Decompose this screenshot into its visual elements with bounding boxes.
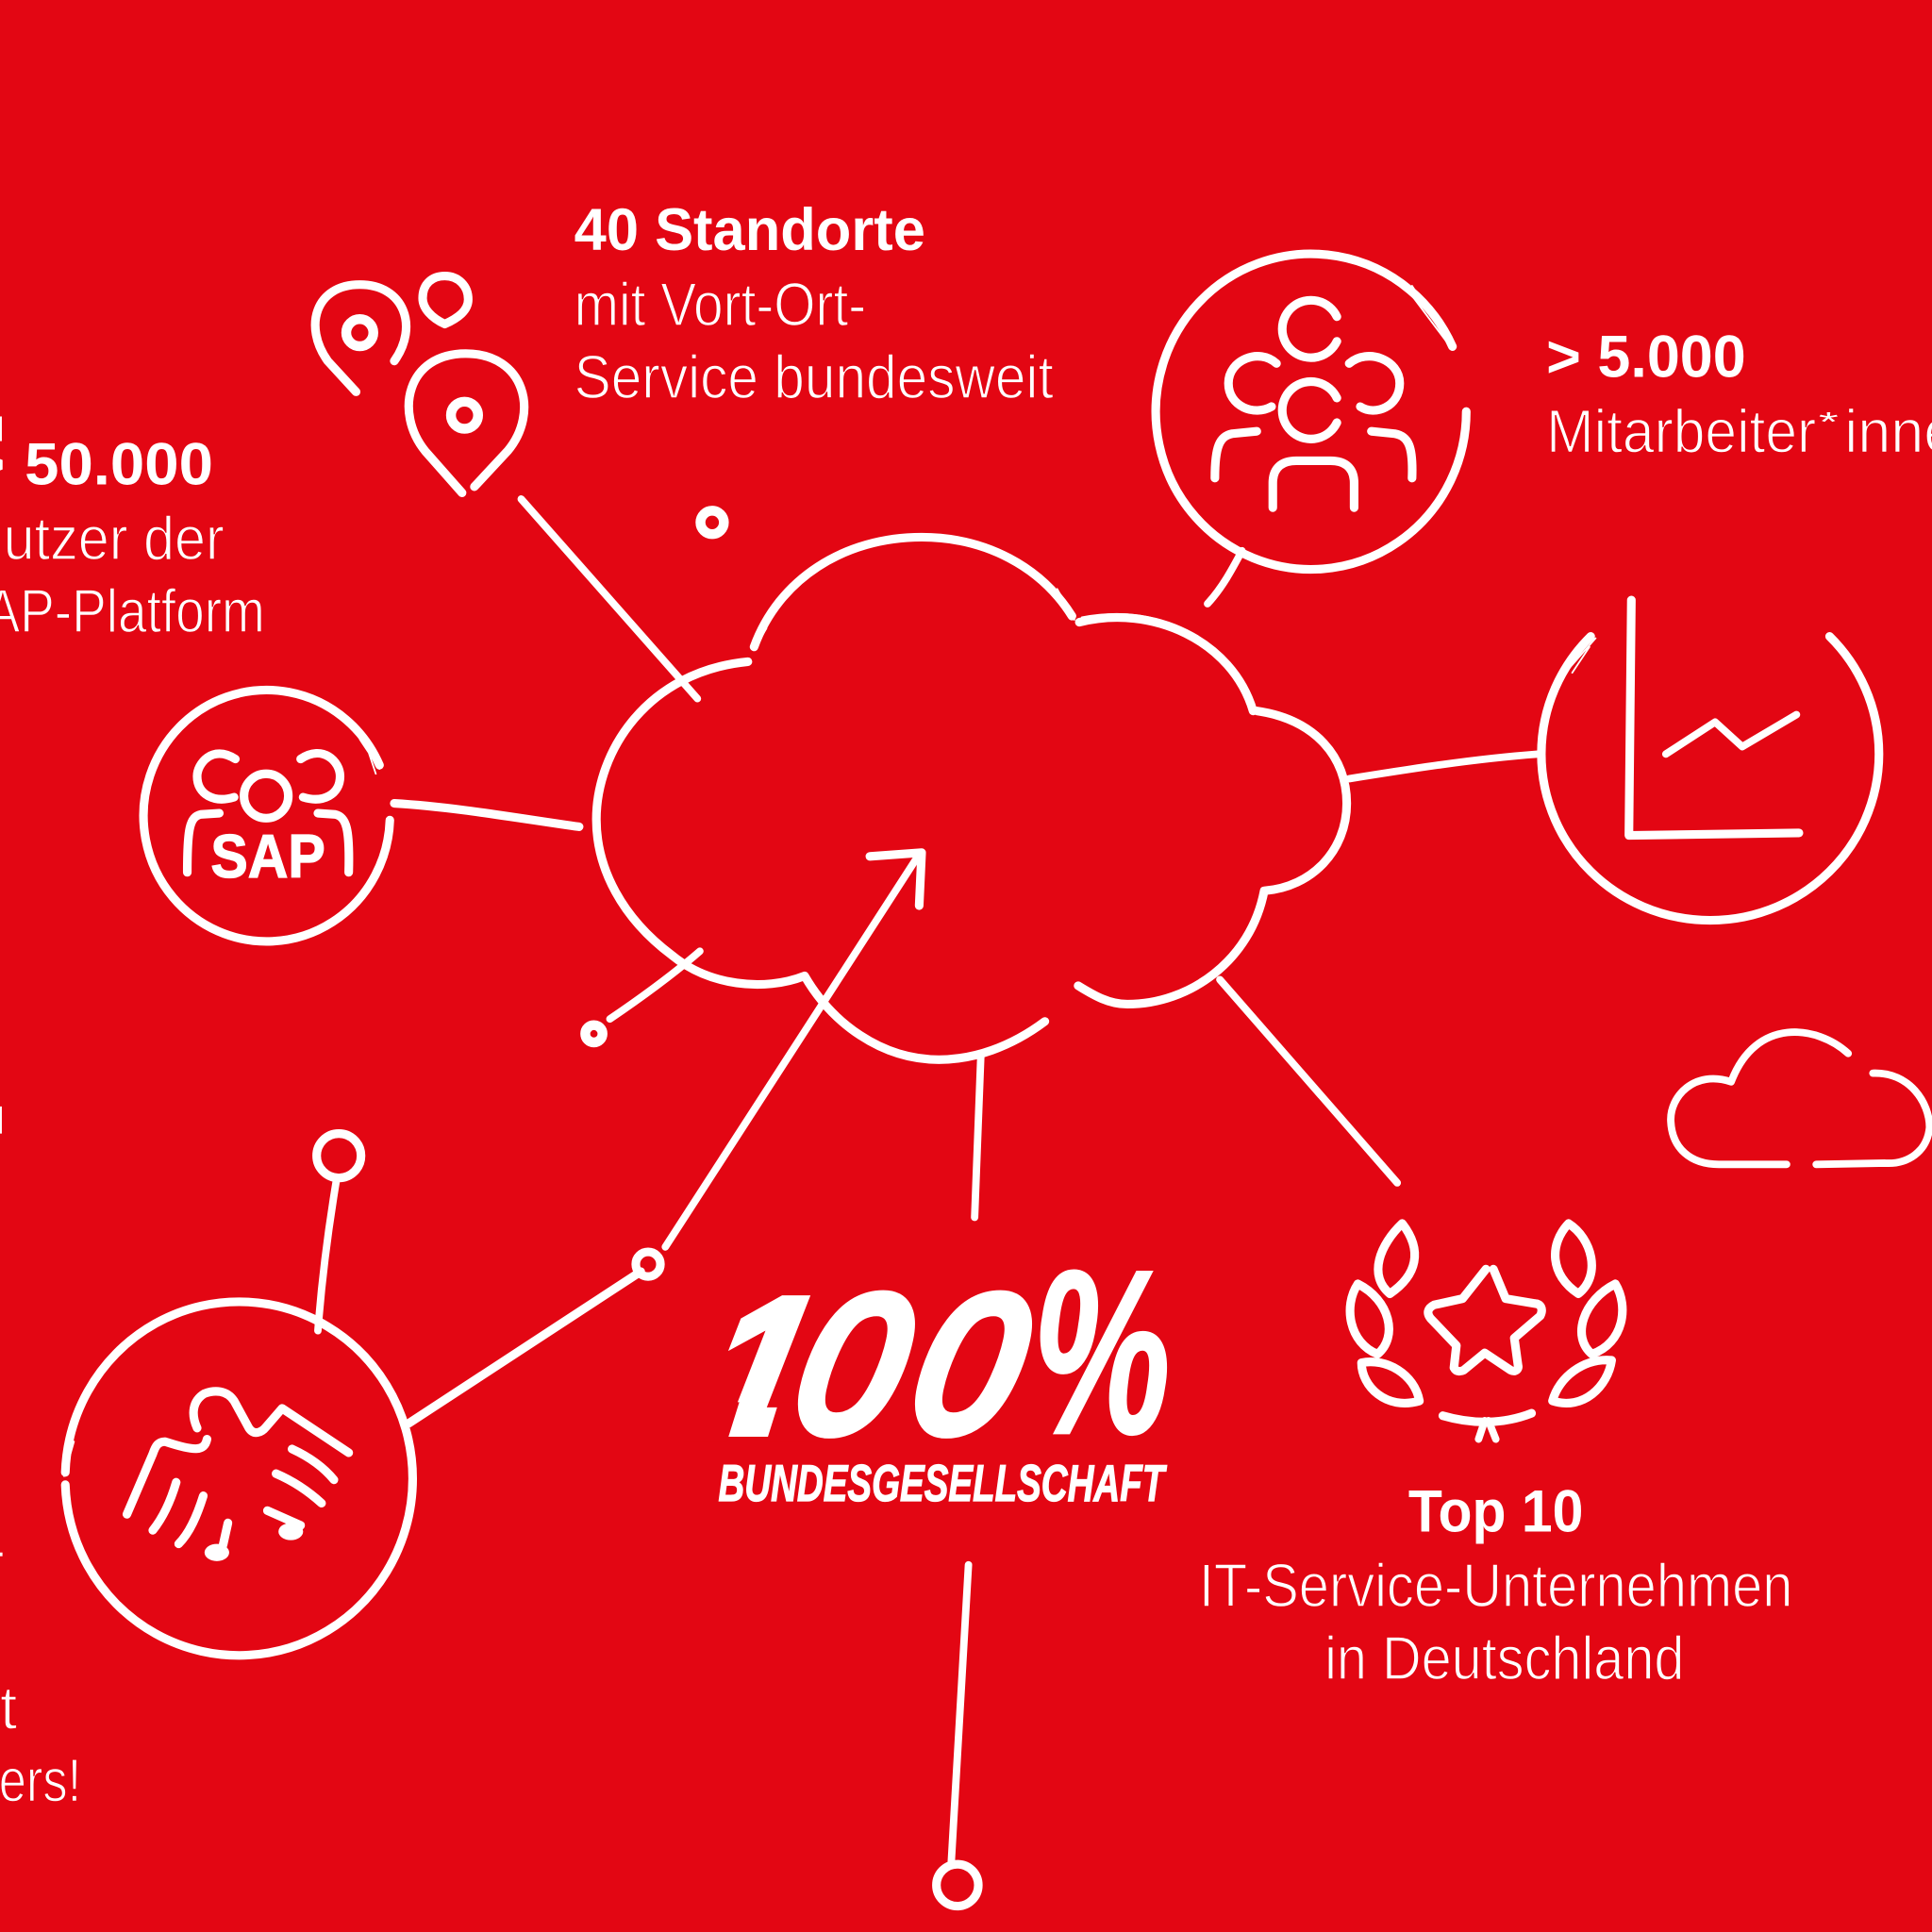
stat: 5.000 Mitarbeiter: > 5.000 <box>1546 325 1746 391</box>
node: small ring lower left of cloud <box>585 1025 603 1042</box>
stat: 5.000 Mitarbeiter: * <box>1819 408 1839 438</box>
arrow into cloud <box>665 853 922 1247</box>
stat: 5.000 Mitarbeiter <box>1546 325 1932 465</box>
headline: 100% Bundesgesellschaft: 0 <box>897 1256 1043 1472</box>
node: bottom ring <box>937 1864 978 1907</box>
headline: 100% Bundesgesellschaft: % <box>1033 1221 1171 1483</box>
headline: 100% Bundesgesellschaft <box>684 1221 1171 1512</box>
stat: 5.000 Mitarbeiter: Mitarbeiter <box>1546 396 1816 465</box>
connector: SAP to cloud <box>394 804 579 826</box>
stat: 40 Standorte: Service bundesweit <box>575 342 1054 411</box>
node: ring above eagle <box>317 1134 361 1178</box>
stat: 40 Standorte: mit Vort-Ort- <box>575 270 866 339</box>
connector: eagle to top ring <box>318 1180 337 1331</box>
connector: eagle to middle ring <box>409 1272 641 1424</box>
icon: laurel and star <box>1350 1224 1623 1440</box>
connector: bottom line <box>951 1565 969 1863</box>
headline: 100% Bundesgesellschaft: 0 <box>780 1256 926 1472</box>
icon: eagle handshake circle <box>64 1302 412 1656</box>
node: small ring above cloud <box>701 510 724 534</box>
connector: cloud to 100 percent <box>974 1058 981 1217</box>
text fragment lower left: t <box>0 1673 17 1741</box>
stat: Top 10: in Deutschland <box>1324 1624 1684 1692</box>
headline: 100% Bundesgesellschaft: BUNDESGESELLSCHAFT <box>718 1454 1167 1512</box>
stat: 50.000 Nutzer <box>0 431 265 645</box>
icon: SAP users circle: SAP <box>210 822 325 891</box>
node: ring between eagle and arrow <box>636 1252 660 1276</box>
text fragment lower left <box>0 1673 81 1815</box>
central cloud <box>596 537 1347 1059</box>
stat: Top 10 <box>1199 1479 1792 1692</box>
connector: cloud to chart <box>1349 754 1538 778</box>
icon: SAP users circle <box>143 691 390 941</box>
connector: cloud to laurel <box>1220 979 1397 1183</box>
connector: people to cloud <box>1208 551 1242 604</box>
location pins icon <box>315 276 525 492</box>
text fragment lower left: ers! <box>0 1746 81 1815</box>
stat: Top 10: IT-Service-Unternehmen <box>1199 1551 1792 1620</box>
icon: small cloud <box>1671 1032 1929 1164</box>
icon: growth chart circle <box>1541 600 1879 921</box>
stat: 50.000 Nutzer: 50.000 <box>25 431 213 497</box>
icon: people circle <box>1156 254 1466 570</box>
connector: small node to cloud <box>610 951 700 1019</box>
connector: locations to cloud <box>521 499 697 699</box>
headline: 100% Bundesgesellschaft: 1 <box>688 1257 832 1475</box>
stat: Top 10: Top 10 <box>1408 1479 1583 1545</box>
stat: 40 Standorte: 40 Standorte <box>575 197 925 263</box>
stat: 40 Standorte <box>575 197 1054 411</box>
